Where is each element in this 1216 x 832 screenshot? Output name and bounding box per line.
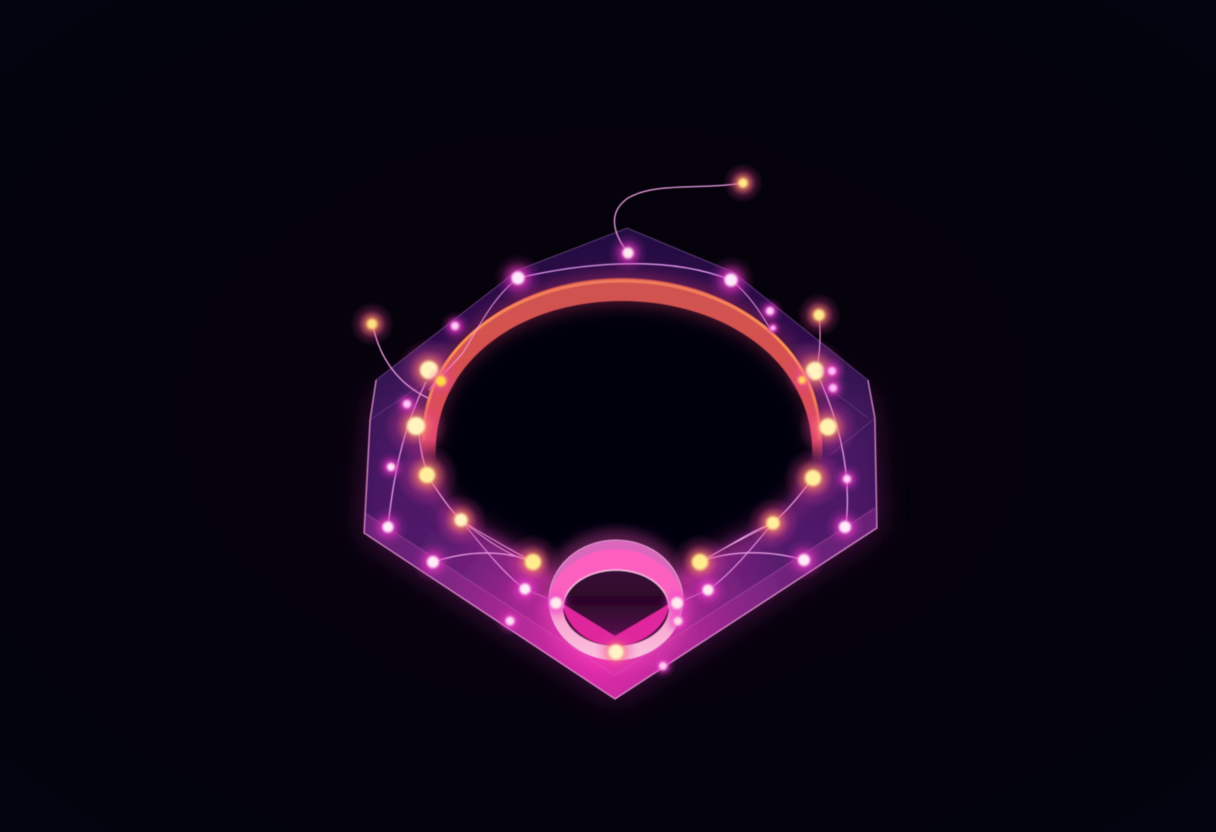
- yellow light nodes: [350, 163, 858, 590]
- pink light nodes: [368, 233, 865, 679]
- chain glow: [427, 475, 813, 562]
- orange arc: [421, 278, 822, 462]
- ring: [540, 530, 692, 670]
- inner V glow beneath ring: [537, 565, 690, 635]
- outer panel glow: [364, 270, 877, 699]
- connecting filaments: [373, 183, 847, 603]
- faceted translucent panel: [364, 228, 877, 699]
- dark centre opening: [426, 288, 818, 636]
